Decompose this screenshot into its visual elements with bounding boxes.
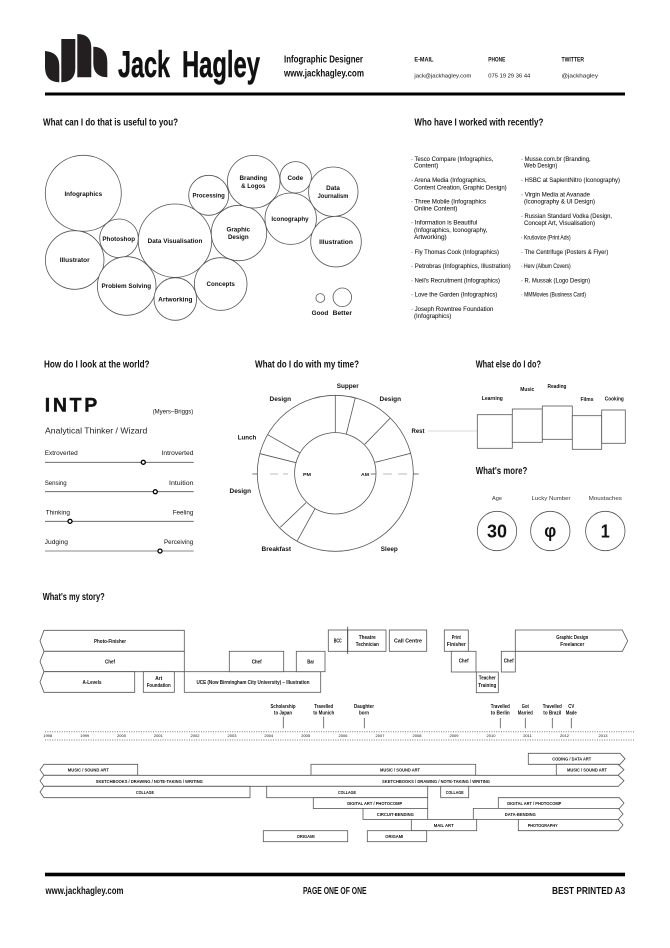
client list: column two: · Musse.com.br (Branding, [521,157,591,163]
timeline bars: life events: Call Centre [394,639,422,645]
bubble chart: skills: Graphic [226,226,250,234]
contact: email: jack@jackhagley.com [413,73,472,79]
client list: column two: · Krušovice (Print Ads) [521,236,571,242]
donut chart: daily time: Design [230,488,251,495]
client list: column one: Content Creation, Graphic Design) [414,186,507,192]
timeline bars: creative practices: COLLAGE [136,790,155,796]
bubble chart: skills: Photoshop [102,236,135,243]
block chart: other activities: Learning [482,396,503,402]
stat: lucky number [531,496,571,551]
timeline events: to Munich [313,710,334,716]
client list: column two: · R. Mussak (Logo Design) [521,278,590,284]
client list: column one: Online Content) [414,206,457,212]
timeline bars: creative practices: ORIGAMI [385,834,404,840]
bubble chart: skills: Data [326,185,340,192]
legend: good and better: Good [312,310,329,317]
timeline events: CV [568,704,575,710]
client list: column two: · HSBC at SapientNitro (Iconography) [521,178,620,184]
bubble chart: skills: Branding [239,175,267,182]
timeline axis: years: 2008 [413,733,422,738]
client list: column one: (Infographics, Iconography, [414,228,488,234]
donut chart: daily time: PM [303,472,311,478]
slider: thinking to feeling [45,509,194,523]
client list: column one: · Information is Beautiful [411,220,477,226]
contact: twitter: TWITTER [562,58,585,64]
donut chart: daily time [230,383,425,553]
client list: column one: · Joseph Rowntree Foundation [411,307,493,313]
bubble chart: skills: Concepts [207,281,235,288]
role and website [283,54,364,80]
personality type: INTP [45,395,97,417]
client list: column two: · The Centrifuge (Posters & Flyer) [521,250,608,256]
name [118,44,260,85]
bubble chart: skills: Iconography [271,216,309,223]
slider: sensing to intuition: Sensing [45,480,67,487]
contact: email [413,58,472,79]
slider: sensing to intuition: Intuition [169,480,194,487]
timeline bars: life events [40,627,628,693]
client list: column two: Concept Art, Visualisation) [524,221,595,227]
timeline axis: years: 2009 [450,733,459,738]
bubble chart: skills: Processing [193,192,225,200]
timeline bars: creative practices: COLLAGE [446,790,464,796]
timeline bars: creative practices: SKETCHBOOKS / DRAWING / NOTE-TAKING / WRITING [96,779,203,785]
heading: world view: How do I look at the world? [44,358,150,370]
contact: twitter: @jackhagley [562,73,598,79]
contact: email: E-MAIL [414,58,434,64]
client list: column two: · Virgin Media at Avanade [521,192,591,198]
timeline events: Married [518,710,533,716]
timeline axis: years [43,732,634,740]
stat: moustaches [586,496,625,551]
timeline bars: creative practices: CODING / DATA ART [552,757,591,763]
client list: column two [521,157,620,298]
donut chart: daily time: Design [270,396,291,403]
timeline bars: life events: Teacher [479,676,496,682]
timeline bars: life events: Bar [307,659,314,665]
footer: www.jackhagley.com [45,885,124,897]
timeline axis: years: 2007 [376,733,385,738]
slider: judging to perceiving: Judging [45,539,68,546]
timeline bars: creative practices: COLLAGE [338,790,357,796]
bubble chart: skills: Data Visualisation [148,238,202,245]
timeline axis: years: 2013 [599,733,608,738]
client list: column one: · Petrobras (Infographics, Illustration) [411,264,511,270]
footer [45,885,625,897]
bubble chart: skills: Journalism [318,193,348,200]
donut chart: daily time: Sleep [381,546,398,553]
timeline bars: creative practices: DIGITAL ART / PHOTOCOMP [347,801,403,807]
timeline bars: life events: BCC [334,639,342,645]
timeline bars: creative practices: SKETCHBOOKS / DRAWING / NOTE-TAKING / WRITING [382,779,490,785]
role and website: www.jackhagley.com [283,69,364,80]
bubble chart: skills: Artworking [158,296,192,304]
timeline bars: life events: Chef [504,659,514,665]
client list: column two: Web Design) [524,164,557,170]
block chart: other activities [477,384,625,449]
timeline events: Travelled [543,704,562,710]
bubble chart: skills: Infographics [64,191,102,198]
timeline bars: creative practices: DATA-BENDING [505,812,536,818]
slider: judging to perceiving: Perceiving [164,539,194,546]
timeline bars: life events: Finisher [447,642,466,648]
timeline bars: life events: UCE (Now Birmingham City University) – Illustration [196,680,310,686]
timeline axis: years: 2012 [560,733,570,738]
bubble chart: skills [45,155,361,320]
timeline axis: years: 2002 [191,733,200,738]
slider: extroverted to introverted [45,450,194,464]
client list: column one: · Neil's Recruitment (Infographics) [411,278,500,284]
timeline bars: creative practices: ORIGAMI [297,834,315,840]
timeline bars: creative practices: MAIL ART [434,823,454,829]
personality type: (Myers–Briggs) [153,408,193,415]
block chart: other activities: Reading [548,384,566,390]
client list: column one: · Love the Garden (Infographics) [411,292,497,298]
timeline bars: life events: Theatre [359,635,376,641]
timeline bars: life events: Art [155,676,163,682]
timeline bars: life events: Chef [459,659,469,665]
personality type [45,395,193,435]
contact: phone [488,58,530,79]
slider: extroverted to introverted: Extroverted [45,450,78,457]
timeline bars: life events: Print [452,635,461,641]
timeline events: Made [566,710,577,716]
timeline bars: life events: Foundation [147,683,171,689]
timeline events: Travelled [491,704,510,710]
heading: time: What do I do with my time? [255,358,359,370]
timeline bars: life events: A-Levels [82,680,102,686]
stat: lucky number: Lucky Number [532,496,571,502]
footer: PAGE ONE OF ONE [303,885,367,897]
stat: age: 30 [487,522,507,542]
timeline axis: years: 1999 [80,733,90,738]
slider: extroverted to introverted: Introverted [162,450,194,457]
timeline bars: life events: Chef [105,659,115,665]
slider: sensing to intuition [45,480,194,494]
timeline events: to Brazil [543,710,562,716]
timeline bars: creative practices: DIGITAL ART / PHOTOCOMP [507,801,562,807]
donut chart: daily time: Lunch [238,435,256,442]
heading: useful: What can I do that is useful to you? [43,116,178,128]
slider: thinking to feeling: Feeling [173,509,194,516]
donut chart: daily time: Breakfast [262,546,292,553]
client list: column one: Content) [414,164,438,170]
personality type: Analytical Thinker / Wizard [45,425,148,435]
bubble chart: skills: Illustration [319,239,353,246]
timeline axis: years: 2010 [487,733,496,738]
stat: lucky number: φ [544,521,556,541]
timeline bars: life events: Graphic Design [556,635,588,641]
contact: twitter [562,58,598,79]
slider: judging to perceiving [45,539,194,553]
legend: good and better: Better [333,310,353,317]
timeline bars: creative practices: MUSIC / SOUND ART [68,768,109,774]
timeline bars: life events: Freelancer [560,642,584,648]
legend: good and better [312,288,353,317]
sliders: personality traits [45,450,194,553]
block chart: other activities: Cooking [605,396,624,402]
timeline events: born [359,710,369,716]
timeline axis: years: 2000 [117,733,127,738]
block chart: other activities: Films [580,397,594,403]
client list: column two: (Iconography & UI Design) [524,200,595,206]
donut chart: daily time: Rest [412,428,425,435]
timeline bars: life events: Chef [252,659,262,665]
client list: column two: · Russian Standard Vodka (Design, [521,214,612,220]
client list: column one: (Infographics) [414,314,451,320]
donut chart: daily time: Supper [337,383,359,390]
icon: logo [45,34,107,82]
client list: column one: · Arena Media (Infographics, [411,178,487,184]
name: Hagley [182,44,260,85]
client list: column one: · Tesco Compare (Infographics, [411,157,494,163]
timeline events: Got [522,704,529,710]
timeline bars: life events: Photo-Finisher [94,639,126,645]
timeline axis: years: 2011 [523,733,533,738]
timeline events: Daughter [354,704,374,710]
timeline axis: years: 2004 [264,733,274,738]
timeline events: to Berlin [491,710,510,716]
timeline bars: creative practices: CIRCUIT-BENDING [377,812,414,818]
timeline events: Travelled [314,704,333,710]
timeline events [270,704,577,728]
timeline events: Scholarship [270,704,296,710]
bubble chart: skills: Design [228,234,249,241]
client list: column two: · Herv (Album Covers) [521,264,571,270]
contact: phone: PHONE [488,58,505,64]
header [45,34,598,85]
timeline bars: life events: Technician [356,642,379,648]
name: Jack [118,44,170,85]
client list: column two: · MMMovies (Business Card) [521,292,586,298]
contact: phone: 075 19 29 36 44 [488,73,530,79]
axis ticks [252,473,419,475]
heading: worked with: Who have I worked with recently? [414,116,543,128]
connector: rest to learning [428,430,477,432]
timeline axis: years: 2003 [228,733,237,738]
client list: column one [411,157,511,320]
stat: moustaches: 1 [601,522,610,542]
block chart: other activities: Music [520,387,535,393]
bubble chart: skills: Problem Solving [101,283,151,290]
client list: column one: · Three Mobile (Infographics [411,200,486,206]
stat: moustaches: Moustaches [589,496,622,502]
heading: what's more: What's more? [476,465,527,477]
timeline bars: creative practices: PHOTOGRAPHY [528,823,558,829]
stat: age: Age [492,496,502,502]
stat: age [477,496,517,551]
timeline bars: creative practices: MUSIC / SOUND ART [567,768,607,774]
timeline bars: creative practices: MUSIC / SOUND ART [380,768,420,774]
timeline bars: creative practices [40,753,625,842]
role and website: Infographic Designer [284,54,363,66]
timeline bars: life events: Training [478,683,496,689]
slider: thinking to feeling: Thinking [46,509,70,516]
timeline axis: years: 2001 [154,733,164,738]
donut chart: daily time: AM [361,472,369,478]
client list: column one: · Fly Thomas Cook (Infographics) [411,250,499,256]
bubble chart: skills: Illustrator [60,257,90,264]
timeline axis: years: 1998 [43,733,53,738]
client list: column one: Artworking) [414,235,447,241]
heading: story: What's my story? [43,591,105,603]
timeline axis: years: 2005 [301,733,311,738]
heading: what else: What else do I do? [476,358,541,370]
timeline events: to Japan [274,710,292,716]
footer: BEST PRINTED A3 [552,885,625,897]
bubble chart: skills: Code [287,175,303,182]
bubble chart: skills: & Logos [241,183,266,190]
timeline axis: years: 2006 [339,733,348,738]
donut chart: daily time: Design [380,396,401,403]
